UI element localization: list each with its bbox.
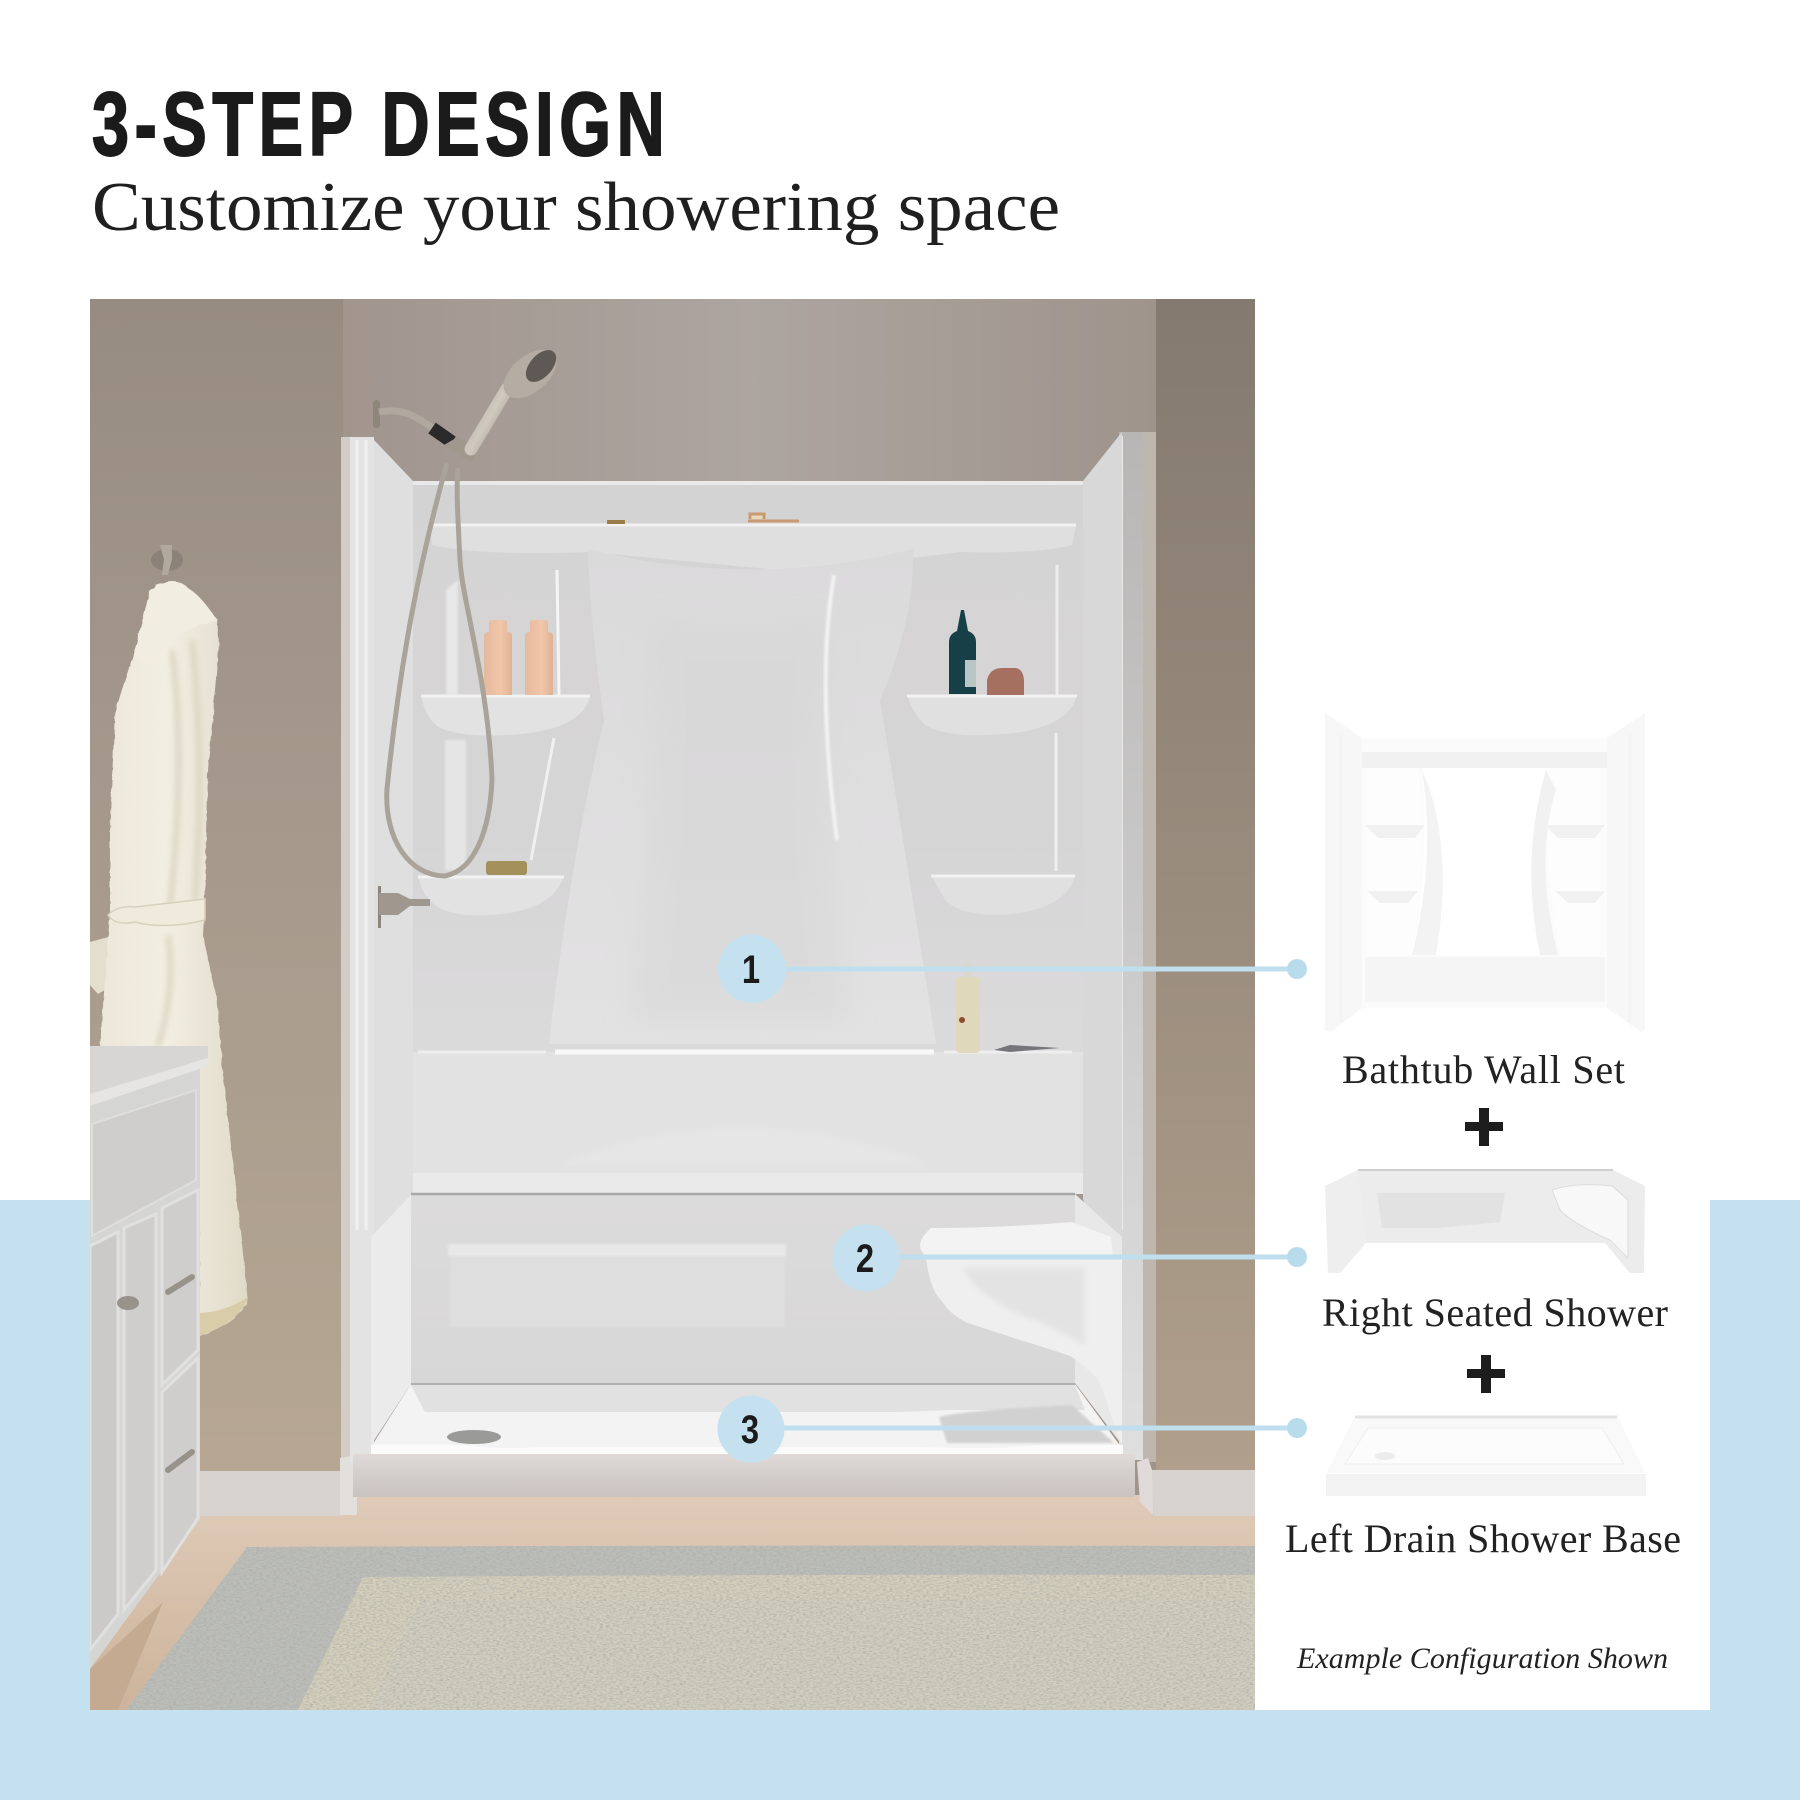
bathroom photo [90,299,1255,1710]
left wall edge strip [341,437,350,1462]
holder [444,438,482,462]
vanity body [90,1066,200,1669]
top drawer panel [92,1090,196,1236]
hourglass panel [549,549,936,1044]
lotion bottle [956,962,980,1053]
caption: Example Configuration Shown [1296,1642,1668,1675]
title: 3-STEP DESIGN [92,73,665,174]
left alcove vertical highlight [445,740,466,870]
robe fold [158,640,199,1046]
plus 1 [1465,1108,1503,1146]
left lower alcove stripe [531,738,554,860]
lower pull [168,1452,192,1470]
tray inner [1345,1428,1624,1464]
top shelf [430,524,1076,572]
lower ledge band [413,1173,1083,1194]
rug [126,1546,1255,1710]
label: left drain shower base: Left Drain Shower Base [1285,1516,1681,1561]
top band [1362,752,1607,768]
base seam [411,1383,1075,1385]
seat top [920,1222,1113,1256]
right side [1605,1170,1645,1273]
floor [90,1495,1255,1710]
left lower shelf [418,876,564,915]
hose [387,463,492,876]
number 3: 3 [741,1407,759,1452]
backrest [450,1254,785,1327]
lotion cap [963,962,973,978]
seated shower back panel [411,1194,1075,1384]
product: right seated shower [1325,1170,1645,1273]
product: bathtub wall set [1325,713,1645,1032]
right upper shelf edge [907,694,1077,698]
right baseboard [1150,1470,1255,1516]
white side panel [1255,299,1710,1710]
robe sleeve end [90,937,108,994]
robe hood [134,582,217,656]
escutcheon [378,886,381,928]
seat underside shadow [962,1268,1085,1345]
outer left trim [350,437,374,1464]
teal bottle [949,610,976,694]
left trim highlight [357,440,366,1230]
outer side panels [1325,713,1645,1032]
left alcove soft highlight [446,580,458,695]
rug inner field [298,1575,1255,1710]
connector line 2 [866,1254,1297,1260]
shower head [495,340,565,408]
lotion body [956,977,980,1053]
rug center [370,1600,1255,1710]
left upper shelf [421,695,590,736]
vanity [90,1046,208,1710]
left lower shelf edge [418,876,564,878]
number 1: 1 [742,947,760,992]
number 2: 2 [856,1236,874,1281]
connector line 1 [752,966,1297,972]
left wall [90,299,343,1499]
right alcove stripes [1056,565,1057,871]
right lower side panel [1075,1194,1122,1445]
lower ledge highlight center [555,1050,934,1054]
robe hem lining [200,1297,248,1336]
hourglass [1412,768,1550,955]
end dot 1 [1287,959,1307,979]
connector line 3 [751,1426,1297,1430]
wall flange [373,400,380,428]
callout 1 [718,935,1307,1003]
razor [994,1045,1060,1052]
upper right door [162,1190,198,1385]
end dot 2 [1287,1247,1307,1267]
label: bathtub wall set: Bathtub Wall Set [1342,1047,1625,1092]
back wall panel [413,481,1083,1193]
right plinth [1137,1458,1153,1515]
shampoo bottles [484,620,553,695]
bottle label [965,660,976,687]
outer right trim [1119,432,1143,1460]
product: left drain shower base [1326,1416,1646,1496]
right wall edge strip [1143,432,1156,1462]
right wall flange [1083,432,1122,1270]
vanity counter edge [90,1058,208,1106]
shower unit [350,432,1143,1497]
back panel [1358,1170,1613,1243]
base upper step [411,1385,1085,1412]
right contour [1531,770,1558,955]
right trim highlight [1119,436,1123,1230]
front apron [1326,1474,1646,1496]
handle [379,893,430,915]
right wall [1156,299,1255,1499]
hourglass shading [630,620,850,1020]
badge 3 [718,1396,784,1462]
hand shower and hose [373,340,565,876]
shower base floor [371,1384,1121,1458]
top band [413,481,1083,524]
hook plate [151,549,183,571]
left plinth [340,1456,357,1515]
subtitle: Customize your showering space [92,169,1060,246]
callout 3 [718,1396,1307,1462]
seat pedestal [926,1258,1122,1445]
right upper shelf [907,695,1077,735]
knob [117,1296,139,1310]
right lower shelf edge [931,874,1075,878]
badge 1 [718,935,786,1003]
end dot 3 [1287,1418,1307,1438]
seat floor reflection shadow [939,1405,1114,1443]
upper pull [168,1277,192,1292]
side seams [1341,735,1630,1022]
peach bottle left [484,620,512,695]
left contour [1412,770,1443,955]
hourglass highlights [826,575,837,840]
top shelf edge [430,524,1076,526]
plus 2 [1467,1355,1505,1393]
teal bottle and clip [949,610,1024,695]
floor drain [447,1430,501,1444]
handle [471,389,507,449]
vanity shadow [90,1602,163,1710]
toothbrush [748,514,799,521]
robe body [100,581,248,1335]
seat [1552,1185,1628,1258]
background: light blue band [0,1200,1800,1800]
top lip [1358,1169,1613,1171]
small item on ledge [607,520,625,524]
back panel [1362,738,1607,1008]
right lower shelf [931,875,1075,915]
left alcove [1368,770,1423,955]
callout 2 [832,1224,1307,1292]
door left [90,1232,118,1650]
bathrobe [90,581,248,1336]
soap bar [486,861,527,875]
badge 2 [832,1224,900,1292]
vanity counter [90,1046,208,1094]
left alcove stripe [557,570,559,695]
hair clip [987,668,1024,695]
shelves [1365,825,1605,903]
shower face [520,345,562,387]
left baseboard [199,1471,342,1516]
base apron [353,1454,1135,1497]
tray rim [1355,1416,1617,1418]
right alcove [1547,770,1600,955]
tub-wall curve [560,1128,930,1165]
left lower side panel [371,1195,411,1445]
lower band [1365,957,1605,1002]
top band highlight [413,481,1083,485]
backrest [1377,1193,1505,1228]
lower ledge [413,1052,1083,1173]
faucet handle [378,886,430,928]
lower right drawer [162,1358,198,1572]
hook [160,545,172,575]
seam [411,1193,1075,1195]
backrest cap [448,1244,786,1256]
base lip [371,1445,1123,1456]
lotion label [959,1017,965,1023]
lower ledge highlight left [418,1050,1072,1054]
arm connector [432,428,452,442]
left upper shelf edge [421,694,590,698]
door middle [124,1214,156,1610]
tray [1326,1416,1646,1473]
peach bottle right [525,620,553,695]
left side [1325,1170,1366,1273]
left wall flange [374,440,413,1270]
drain [1375,1452,1395,1460]
robe hook [151,545,183,575]
label: right seated shower: Right Seated Shower [1322,1290,1668,1335]
back wall [340,299,1160,1499]
robe belt [108,899,205,926]
shower arm [379,411,436,431]
rug outer border [126,1546,1255,1710]
